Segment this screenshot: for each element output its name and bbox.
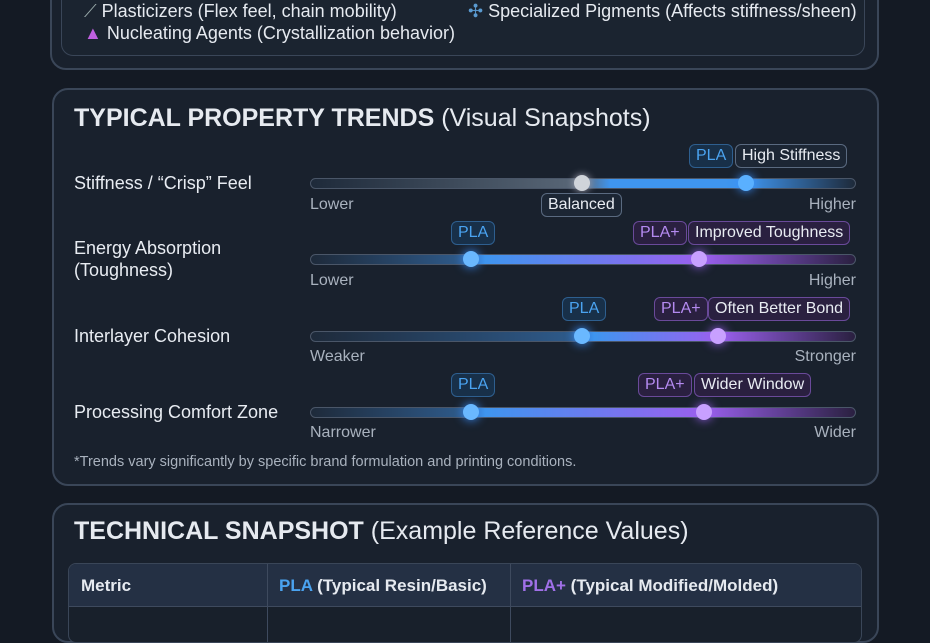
panel: technical snapshot: [52, 503, 879, 643]
row: interlayer cohesion: PLA: [569, 300, 599, 317]
row: energy absorption: Energy Absorption: [74, 238, 221, 258]
row: interlayer cohesion: Stronger: [795, 348, 856, 365]
heading: technical snapshot: TECHNICAL SNAPSHOT (Example Reference Values): [74, 517, 689, 545]
row: stiffness: PLA: [696, 147, 726, 164]
table: [68, 563, 862, 643]
row: stiffness: Balanced: [548, 196, 615, 213]
table: PLA+ (Typical Modified/Molded): [522, 576, 778, 595]
heading: property trends: TYPICAL PROPERTY TRENDS (Visual Snapshots): [74, 104, 651, 132]
table: PLA (Typical Resin/Basic): [279, 576, 487, 595]
inner additives box: [61, 0, 865, 56]
panel: property trends: [52, 88, 879, 486]
row: stiffness: Higher: [809, 196, 856, 213]
row: energy absorption: [74, 221, 856, 289]
row: processing comfort: Processing Comfort Zone: [74, 402, 278, 422]
row: stiffness: High Stiffness: [742, 147, 840, 164]
row: stiffness: Stiffness / “Crisp” Feel: [74, 173, 252, 193]
additive: pigments: ✣ Specialized Pigments (Affects stiffness/sheen): [468, 1, 857, 21]
row: processing comfort: Wider Window: [701, 376, 804, 393]
row: processing comfort: [74, 373, 856, 441]
row: stiffness: [74, 144, 856, 217]
row: processing comfort: PLA: [458, 376, 488, 393]
row: processing comfort: PLA+: [645, 376, 685, 393]
row: energy absorption: (Toughness): [74, 260, 173, 280]
additive: nucleating: ▲ Nucleating Agents (Crystallization behavior): [84, 23, 455, 43]
row: interlayer cohesion: Often Better Bond: [715, 300, 843, 317]
footnote: *Trends vary significantly by specific brand formulation and printing conditions.: [74, 454, 576, 470]
row: interlayer cohesion: [74, 297, 856, 365]
row: energy absorption: PLA+: [640, 224, 680, 241]
additive: plasticizers: ⟋ Plasticizers (Flex feel, chain mobility): [84, 1, 397, 21]
row: energy absorption: Lower: [310, 272, 354, 289]
row: energy absorption: Higher: [809, 272, 856, 289]
table: Metric: [81, 576, 131, 595]
row: processing comfort: Wider: [814, 424, 856, 441]
row: energy absorption: Improved Toughness: [695, 224, 843, 241]
row: stiffness: Lower: [310, 196, 354, 213]
row: interlayer cohesion: PLA+: [661, 300, 701, 317]
row: interlayer cohesion: Interlayer Cohesion: [74, 326, 230, 346]
panel: additives: [50, 0, 879, 70]
row: interlayer cohesion: Weaker: [310, 348, 365, 365]
row: energy absorption: PLA: [458, 224, 488, 241]
row: processing comfort: Narrower: [310, 424, 376, 441]
